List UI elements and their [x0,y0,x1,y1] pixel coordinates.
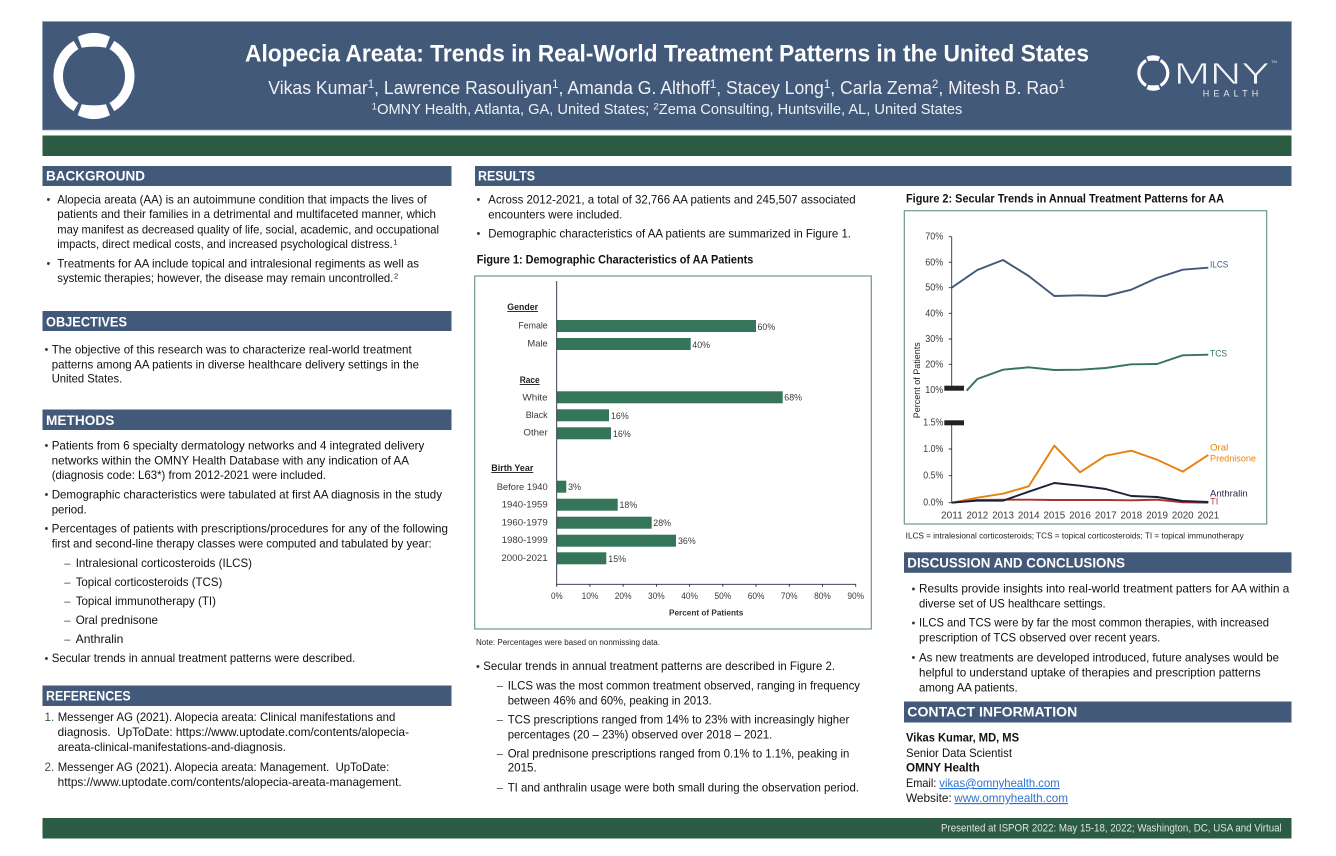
text block: background bullets: 2 [394,272,398,280]
text block: references list: 1. [44,711,54,724]
text block: methods bullets: – [64,596,71,608]
series labels: Oral [1210,443,1228,454]
x axis tick labels: 0% [551,591,563,601]
category labels: 1980-1999 [502,534,548,545]
text block: results intro: Across 2012-2021, a total of 32,766 AA patients and 245,507 associated [488,193,856,206]
line: oral prednisone [952,446,1208,503]
text block: background bullets: Treatments for AA include topical and intralesional regiments as well as [57,257,419,270]
text block: contact details: Vikas Kumar, MD, MS [906,732,1019,745]
text block: methods bullets: – [64,615,71,627]
bar chart: demographic characteristics [475,276,871,629]
text block: references list: areata-clinical-manifestations-and-diagnosis. [58,741,286,754]
text block: objectives: United States. [52,373,122,386]
affiliations: 2 [653,102,659,112]
text block: background bullets: patients and their families in a detrimental and multifaceted manner, which [57,208,436,221]
text block: methods bullets: – [64,577,71,589]
figure 1 title: Figure 1: Demographic Characteristics of AA Patients [477,253,753,266]
category labels: 1960-1979 [502,517,548,528]
panel: objectives [42,311,452,386]
value labels: 36% [678,536,696,546]
x axis tick labels: 10% [582,591,598,601]
text block: references list: https://www.uptodate.com/contents/alopecia-areata-management. [58,776,402,789]
icon: OMNY Health logo: MNY [1174,56,1270,91]
authors: , Carla Zema [830,77,933,98]
figure 1 note: Note: Percentages were based on nonmissing data. [476,638,660,647]
text block: secular trends: – [497,680,504,692]
text block: contact details: OMNY Health [906,762,980,775]
text block: conclusions [912,583,1290,694]
x axis labels: 2011 [941,510,963,521]
text block: methods bullets: Topical corticosteroids (TCS) [76,576,222,589]
text block: methods bullets: (diagnosis code: L63*) from 2012-2021 were included. [52,469,326,482]
x axis labels: 2021 [1198,510,1220,521]
y axis labels [923,232,943,509]
x axis labels: 2017 [1095,510,1117,521]
text block: references list: 2. [44,761,54,774]
x axis tick labels: 20% [615,591,632,601]
x axis tick labels: 90% [847,591,864,601]
y axis labels: 1.5% [923,417,943,428]
x axis labels: 2018 [1120,510,1143,521]
text block: background bullets: may manifest as decreased quality of life, social, academic, and occupational [57,223,439,236]
text block: secular trends: 2015. [508,762,537,775]
heading: contact information [904,702,1292,722]
text block: secular trends: percentages (20 – 23%) observed over 2018 – 2021. [508,728,772,741]
series labels: ILCS [1210,260,1228,271]
heading: references: REFERENCES [46,689,131,704]
x axis labels: 2012 [966,510,989,521]
text block: methods bullets: Anthralin [76,633,123,646]
title: Alopecia Areata: Trends in Real-World Treatment Patterns in the United States [245,41,1089,68]
value labels: 16% [611,411,629,421]
text block: methods bullets: first and second-line therapy classes were computed and tabulated by year: [52,537,432,550]
y axis labels: 70% [925,232,943,243]
category labels: Other [523,427,548,438]
text block: background bullets: impacts, direct medical costs, and increased psychological distress. [57,238,393,251]
authors: 2 [932,77,939,91]
text block: background bullets: • [46,258,50,270]
text block: methods bullets: • [44,653,48,665]
authors: 1 [1059,77,1065,91]
panel: results [475,166,1292,794]
value labels: 40% [692,340,710,350]
text block: methods bullets: • [44,440,48,452]
text block: secular trends: – [497,748,504,760]
text block: methods bullets: Secular trends in annual treatment patterns were described. [52,652,355,665]
line: TCS [967,355,1208,391]
x axis labels: 2019 [1146,510,1168,521]
heading: methods: METHODS [46,413,114,428]
x axis tick labels: 40% [681,591,698,601]
icon: OMNY Health logo: TM [1271,59,1277,64]
x axis labels: 2013 [992,510,1014,521]
text block: background bullets [46,193,439,285]
line: anthralin [952,483,1208,503]
series labels: TCS [1210,349,1227,360]
panel: background [42,166,452,285]
text block: methods bullets: period. [52,503,87,516]
text block: conclusions: ILCS and TCS were by far the most common therapies, with increased [919,617,1269,630]
y axis labels: 0.5% [923,471,943,482]
text block: contact details: www.omnyhealth.com [953,792,1068,805]
heading: background: BACKGROUND [46,169,145,184]
text block: methods bullets: – [64,634,71,646]
data lines [952,260,1208,503]
text block: methods bullets [44,439,448,665]
x axis title: Percent of Patients [669,608,744,618]
y axis labels: 0.0% [923,498,943,509]
text block: results intro: • [476,228,480,240]
text block: background bullets: • [46,194,50,206]
text block: background bullets: 1 [393,238,397,246]
panel: discussion and conclusions [904,552,1292,694]
text block: methods bullets: Oral prednisone [76,614,158,627]
figure 2 footnote: ILCS = intralesional corticosteroids; TCS = topical corticosteroids; TI = topical immunotherapy [906,531,1244,540]
text block: conclusions: • [912,618,916,630]
category labels: Before 1940 [497,481,548,492]
text block: background bullets: systemic therapies; however, the disease may remain uncontrolled. [57,272,393,285]
text block: methods bullets: Demographic characteristics were tabulated at first AA diagnosis in the study [52,488,442,501]
axes [557,281,856,587]
text block: conclusions: • [912,652,916,664]
text block: secular trends: between 46% and 60%, peaking in 2013. [508,694,712,707]
category labels: 1940-1959 [502,499,548,510]
text block: objectives: patterns among AA patients in diverse healthcare delivery settings in the [52,358,419,371]
text block: references list [44,711,409,789]
text block: methods bullets: Topical immunotherapy (TI) [76,595,216,608]
text block: contact details: Email: [906,777,936,790]
heading: results: RESULTS [478,169,535,184]
text block: objectives [44,343,419,386]
y axis labels: 40% [925,308,943,319]
authors: , Amanda G. Althoff [559,77,711,98]
line: TI [952,500,1208,503]
text block: contact details [906,732,1068,805]
series labels: Anthralin [1210,489,1248,500]
heading: discussion and conclusions: DISCUSSION AND CONCLUSIONS [907,556,1125,571]
category labels: Gender [507,301,538,312]
category labels: Black [526,409,548,420]
text block: secular trends: Oral prednisone prescriptions ranged from 0.1% to 1.1%, peaking in [508,747,849,760]
heading: discussion and conclusions [904,552,1292,573]
axes and break marks [944,237,964,503]
y axis labels: 20% [925,359,943,370]
category labels: Birth Year [491,462,534,473]
panel: contact information [904,702,1292,805]
text block: secular trends: ILCS was the most common treatment observed, ranging in frequency [508,679,860,692]
category labels: White [522,392,548,403]
heading: contact information: CONTACT INFORMATION [907,705,1077,720]
text block: background bullets: Alopecia areata (AA) is an autoimmune condition that impacts the lives of [57,193,427,206]
authors: 1 [710,77,717,91]
y axis title: Percent of Patients [912,342,922,418]
icon: OMNY ring mark [58,33,130,119]
value labels: 68% [784,393,802,403]
header banner [42,22,1292,130]
affiliations: Zema Consulting, Huntsville, AL, United States [659,102,962,118]
panel: methods [42,410,452,665]
text block: secular trends: – [497,714,504,726]
line chart: secular treatment trends [904,211,1267,524]
text block: secular trends [476,660,860,794]
text block: conclusions: diverse set of US healthcare settings. [919,597,1106,610]
text block: references list: Messenger AG (2021). Alopecia areata: Management. UpToDate: [58,761,389,774]
authors: 1 [552,77,559,91]
text block: results intro: Demographic characteristics of AA patients are summarized in Figure 1. [488,227,851,240]
footer text: Presented at ISPOR 2022: May 15-18, 2022; Washington, DC, USA and Virtual [941,823,1282,835]
authors: , Mitesh B. Rao [938,77,1059,98]
text block: secular trends: • [476,661,480,673]
icon: OMNY Health logo: HEALTH [1203,89,1258,99]
x axis labels: 2020 [1172,510,1194,521]
text block: results intro: encounters were included. [488,208,622,221]
y axis labels: 10% [925,385,943,396]
category labels: Female [518,320,548,331]
value labels: 60% [758,322,775,332]
x axis tick labels: 80% [814,591,831,601]
heading: objectives: OBJECTIVES [46,315,127,330]
x axis tick labels: 50% [714,591,731,601]
affiliations: 1 [372,102,377,112]
bars [557,320,783,564]
value labels: 3% [568,482,581,492]
text block: objectives: The objective of this research was to characterize real-world treatment [52,343,412,356]
authors: , Lawrence Rasouliyan [374,77,552,98]
text block: secular trends: TI and anthralin usage were both small during the observation period. [508,781,859,794]
text block: methods bullets: – [64,558,71,570]
heading: references [42,686,452,706]
text block: methods bullets: • [44,489,48,501]
text block: conclusions: helpful to understand uptake of therapies and prescription patterns [919,666,1261,679]
text block: objectives: • [44,344,48,356]
text block: methods bullets: Intralesional corticosteroids (ILCS) [76,557,252,570]
green divider band [42,136,1292,156]
text block: conclusions: • [912,584,916,596]
series labels [1210,260,1256,507]
text block: references list: diagnosis. UpToDate: https://www.uptodate.com/contents/alopecia- [58,726,409,739]
affiliations: OMNY Health, Atlanta, GA, United States; [377,102,653,118]
heading: methods [42,410,452,430]
text block: contact details: vikas@omnyhealth.com [939,777,1060,790]
text block: methods bullets: networks within the OMNY Health Database with any indication of AA [52,454,409,467]
text block: conclusions: among AA patients. [919,681,1018,694]
text block: contact details: Senior Data Scientist [906,747,1013,760]
authors: 1 [824,77,831,91]
category labels [491,301,548,563]
x axis labels: 2016 [1069,510,1091,521]
authors: , Stacey Long [716,77,824,98]
text block: conclusions: Results provide insights into real-world treatment patters for AA within a [919,583,1290,596]
x axis tick labels [551,591,864,601]
category labels: Male [527,338,548,349]
text block: results intro: • [476,194,480,206]
series labels: Prednisone [1210,454,1256,465]
y axis labels: 1.0% [923,444,943,455]
x axis tick labels: 30% [648,591,665,601]
authors: Vikas Kumar [268,77,372,98]
text block: methods bullets: Patients from 6 specialty dermatology networks and 4 integrated delivery [52,439,425,452]
y axis labels: 30% [925,334,943,345]
line: ILCS [952,260,1208,296]
figure 2 title: Figure 2: Secular Trends in Annual Treatment Patterns for AA [906,192,1225,205]
text block: secular trends: Secular trends in annual treatment patterns are described in Figure 2. [483,660,835,673]
series labels: TI [1210,496,1218,507]
icon: OMNY Health logo [1139,55,1277,99]
heading: objectives [42,311,452,331]
y axis labels: 50% [925,283,943,294]
x axis tick labels: 70% [781,591,798,601]
text block: contact details: Website: [906,792,952,805]
x axis tick labels: 60% [748,591,764,601]
text block: conclusions: prescription of TCS observed over recent years. [919,631,1160,644]
text block: secular trends: TCS prescriptions ranged from 14% to 23% with increasingly higher [508,713,849,726]
footer band [42,818,1292,838]
value labels [568,322,802,564]
text block: results intro [476,193,856,240]
category labels: Race [520,374,540,385]
value labels: 15% [608,554,626,564]
authors: 1 [368,77,374,91]
category labels: 2000-2021 [501,552,548,563]
x axis labels: 2014 [1018,510,1040,521]
panel: references [42,686,452,789]
value labels: 28% [653,518,671,528]
value labels: 16% [613,429,631,439]
text block: secular trends: – [497,782,504,794]
heading: background [42,166,452,186]
y axis labels: 60% [925,257,943,268]
text block: conclusions: As new treatments are developed introduced, future analyses would be [919,651,1279,664]
text block: references list: Messenger AG (2021). Alopecia areata: Clinical manifestations and [58,711,395,724]
x axis labels: 2015 [1044,510,1066,521]
heading: results [475,166,1292,186]
text block: methods bullets: Percentages of patients with prescriptions/procedures for any of the following [52,522,448,535]
value labels: 18% [620,500,637,510]
text block: methods bullets: • [44,523,48,535]
x axis labels [941,510,1220,521]
